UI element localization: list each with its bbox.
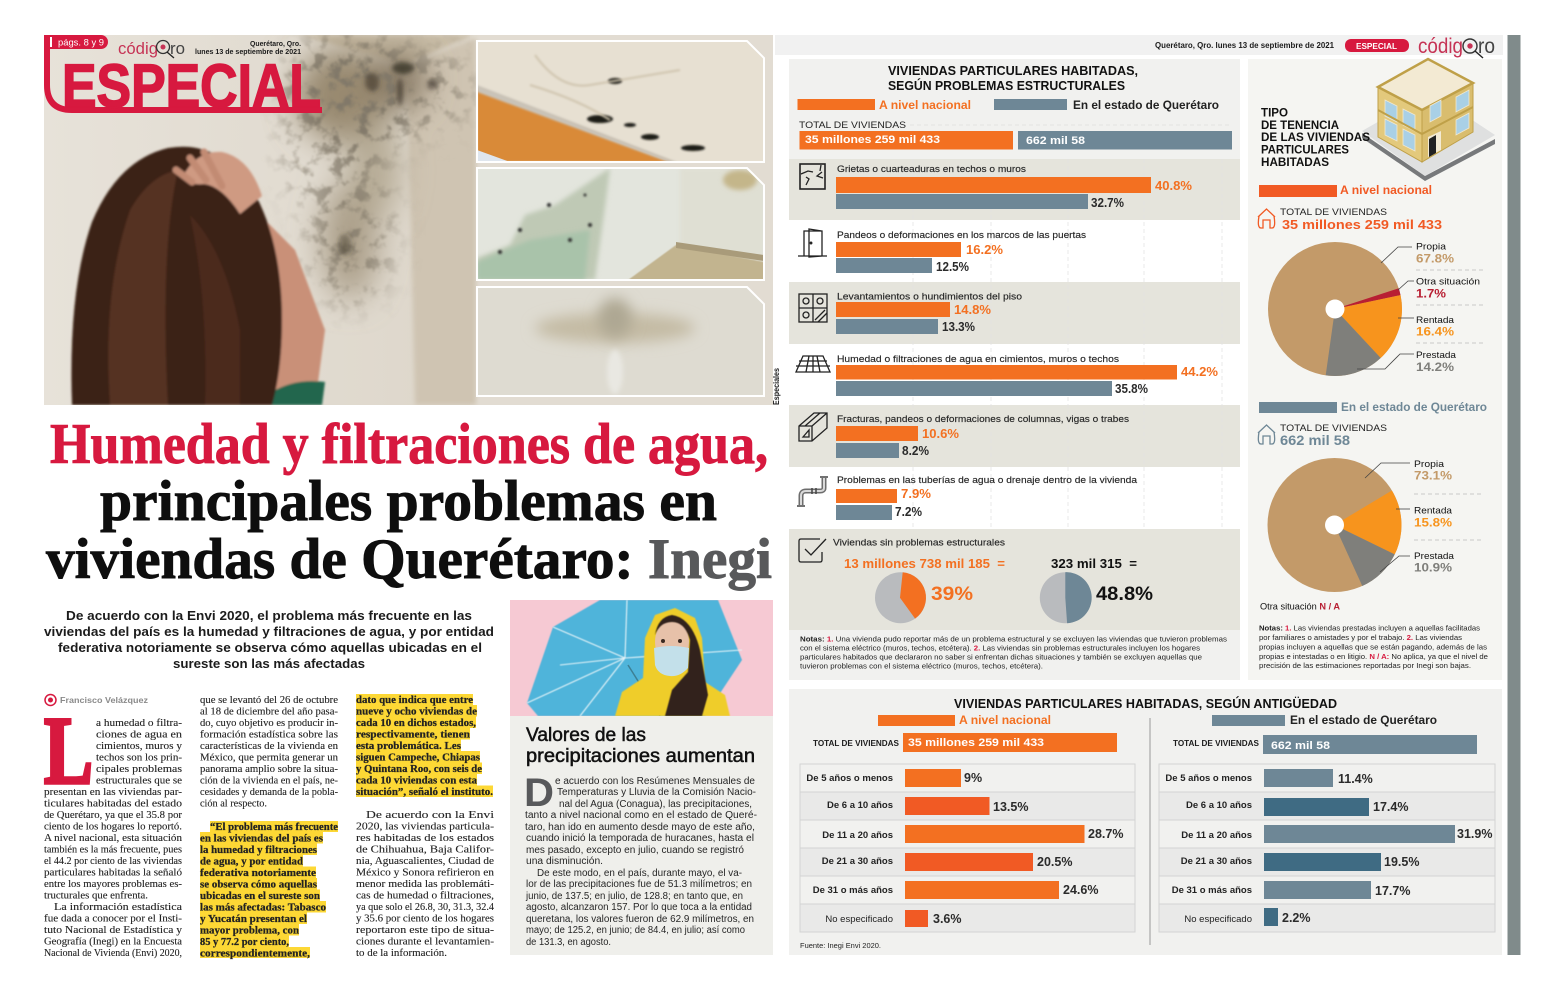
values: 17.4%	[1373, 800, 1408, 814]
article column 1: estructurales que se	[96, 774, 182, 786]
leaders	[1357, 247, 1414, 369]
row: floor: 14.8%	[954, 303, 991, 317]
pie labels: 10.9%	[1414, 560, 1452, 574]
row labels: De 11 a 20 años	[1181, 830, 1252, 841]
article column 3: y 35.6 por ciento de los hogares	[356, 912, 494, 924]
sidebar text: queretana, los valores fueron de 62.9 milímetros, en	[526, 914, 754, 925]
row labels: De 21 a 30 años	[822, 856, 893, 867]
article column 3	[356, 809, 495, 959]
row: cracks: 32.7%	[1091, 196, 1124, 210]
article column 2: características de la vivienda en	[200, 740, 338, 752]
article column 3: nia, Aguascalientes, Ciudad de	[356, 855, 494, 867]
notes	[800, 634, 1227, 670]
article column 1: ticulares habitadas del estado	[44, 798, 183, 810]
values: 20.5%	[1037, 855, 1072, 869]
sidebar text: e acuerdo con los Resúmenes Mensuales de	[555, 776, 755, 787]
row: damp: Humedad o filtraciones de agua en cimientos, muros o techos	[837, 354, 1119, 365]
article column 3: reportaron este tipo de situa-	[356, 924, 494, 936]
header: red tab and section name: págs. 8 y 9	[58, 38, 104, 48]
total bars: 35 millones 259 mil 433	[805, 134, 940, 146]
article column 1: particulares habitadas la señaló	[44, 866, 182, 878]
sidebar heading: Valores de las	[526, 725, 646, 746]
row: no problems: 48.8%	[1096, 584, 1153, 605]
row labels: De 21 a 30 años	[1181, 856, 1252, 867]
logo left: códig	[118, 40, 158, 58]
highlighted quote, column 2: se observa cómo aquellas	[200, 878, 318, 890]
heading: VIVIENDAS PARTICULARES HABITADAS, SEGÚN ANTIGÜEDAD	[954, 696, 1337, 711]
values: 24.6%	[1063, 883, 1098, 897]
pie labels	[1416, 242, 1484, 374]
row: cracks: 40.8%	[1155, 179, 1192, 193]
icon: beam	[799, 413, 827, 441]
highlighted quote, column 3	[356, 694, 493, 798]
row: damp: 44.2%	[1181, 365, 1218, 379]
icon: pipe	[797, 477, 828, 506]
article column 1: entre los mayores problemas es-	[44, 878, 182, 890]
article column 1	[44, 717, 183, 959]
heading	[1261, 108, 1370, 169]
bars	[905, 769, 1084, 927]
section pill: ESPECIAL	[1356, 41, 1397, 51]
row: columns: 8.2%	[902, 444, 929, 458]
highlighted quote, column 3: esta problemática. Les	[356, 740, 462, 752]
article column 1: también es la más frecuente, pues	[44, 844, 182, 856]
row: columns: 10.6%	[922, 427, 959, 441]
row labels	[806, 773, 893, 925]
pie labels: Prestada	[1416, 350, 1457, 361]
total bars: 662 mil 58	[1026, 135, 1085, 147]
row: doors	[798, 229, 1086, 274]
article column 1: de Querétaro, ya que el 35.8 por	[44, 809, 182, 821]
drop cap D: D	[524, 771, 554, 815]
row labels: No especificado	[825, 914, 893, 925]
row labels: De 5 años o menos	[806, 773, 893, 784]
state total: TOTAL DE VIVIENDAS	[1280, 423, 1387, 434]
right page header strip	[775, 35, 1503, 58]
values	[933, 771, 1123, 926]
state total: 662 mil 58	[1280, 432, 1350, 448]
article column 1: cipales problemas	[96, 763, 182, 775]
national legend	[1259, 185, 1432, 197]
logo right: ro	[1478, 35, 1495, 58]
panel: age of dwellings	[789, 689, 1502, 955]
icon: house orange	[1258, 209, 1275, 228]
highlighted quote, column 2: en las viviendas del país es	[200, 832, 324, 844]
right edge bar	[1508, 35, 1520, 955]
pie labels: Prestada	[1414, 551, 1455, 562]
highlighted quote, column 2: “El problema más frecuente	[210, 821, 338, 833]
row: floor	[799, 292, 1022, 334]
highlighted quote, column 3: siguen Campeche, Chiapas	[356, 752, 481, 764]
icon: cracked wall	[800, 164, 825, 189]
notes: Notas: 1. Una vivienda pudo reportar más de un problema estructural y se excluyen las viviendas que tuvieron problemas	[800, 634, 1227, 644]
row labels: De 31 o más años	[1172, 885, 1252, 896]
state chart	[1159, 715, 1495, 932]
bars	[1264, 769, 1455, 926]
headline: principales problemas en	[100, 470, 717, 533]
article column 2: que se levantó del 26 de octubre	[200, 694, 338, 706]
sidebar text: taro, han ido en aumento desde mayo de este año,	[525, 822, 755, 833]
values: 31.9%	[1457, 827, 1492, 841]
heading: TIPO	[1261, 108, 1288, 120]
notes: propias e intestadas o en litigio. N / A: No aplica, ya que el nivel de	[1259, 652, 1488, 661]
pie: state tenure	[1268, 458, 1402, 592]
row: doors: 12.5%	[936, 260, 969, 274]
photo: wall with peeling paint	[477, 168, 764, 280]
pie: national tenure	[1268, 242, 1402, 376]
photo: water stain on ceiling	[532, 290, 698, 393]
article column 1: cimientos, muros y	[96, 740, 183, 752]
article column 1: La información estadística	[54, 901, 182, 913]
highlighted quote, column 3: y Quintana Roo, con seis de	[356, 763, 482, 775]
total bars: TOTAL DE VIVIENDAS	[799, 120, 906, 131]
heading: HABITADAS	[1261, 157, 1329, 169]
panel: tenure	[1248, 59, 1502, 680]
icon: house gray	[1258, 425, 1275, 444]
photo frame 3	[477, 287, 764, 396]
table rows	[800, 764, 1135, 932]
article column 1: fue dada a conocer por el Insti-	[44, 912, 182, 924]
article column 3: ciones durante el levantamien-	[356, 936, 494, 948]
total bars	[799, 120, 1232, 150]
article column 1: A nivel nacional, esta situación	[44, 832, 183, 844]
not applicable note: Otra situación N / A	[1260, 602, 1340, 612]
state total	[1280, 423, 1387, 448]
highlighted quote, column 3: cada 10 en dichos estados,	[356, 717, 476, 729]
highlighted quote, column 2	[200, 821, 338, 960]
highlighted quote, column 2: de agua, y por entidad	[200, 856, 303, 868]
row: no problems: 323 mil 315 =	[1051, 557, 1137, 571]
source: Fuente: Inegi Envi 2020.	[800, 941, 881, 950]
national legend: A nivel nacional	[1340, 185, 1432, 197]
page tab	[44, 35, 108, 49]
values: 17.7%	[1375, 884, 1410, 898]
pie labels: 67.8%	[1416, 252, 1454, 266]
values: 13.5%	[993, 800, 1028, 814]
highlighted quote, column 2: las más afectadas: Tabasco	[200, 902, 327, 914]
heading: DE LAS VIVIENDAS	[1261, 132, 1370, 144]
row labels: De 31 o más años	[813, 885, 893, 896]
dateline left	[195, 39, 301, 56]
legend: A nivel nacional	[879, 100, 971, 112]
dateline left: Querétaro, Qro.	[250, 39, 301, 48]
national chart: A nivel nacional	[959, 715, 1051, 727]
article column 1: ciento de los hogares lo reportó.	[44, 820, 182, 832]
article column 1: tuto Nacional de Estadística y	[44, 924, 183, 936]
row: doors: 16.2%	[966, 243, 1003, 257]
state legend: En el estado de Querétaro	[1341, 402, 1487, 414]
article column 3: México y Sonora refirieron en	[356, 866, 495, 878]
row labels	[1165, 773, 1252, 925]
deck: sureste son las más afectadas	[173, 656, 365, 671]
row: floor: Levantamientos o hundimientos del piso	[837, 292, 1022, 302]
highlighted quote, column 3: situación”, señaló el instituto.	[356, 786, 493, 798]
row: damp	[796, 354, 1218, 396]
highlighted quote, column 2: 85 y 77.2 por ciento,	[200, 936, 289, 948]
section pill	[1345, 39, 1409, 52]
dateline right: Querétaro, Qro. lunes 13 de septiembre de 2021	[1155, 41, 1335, 50]
sidebar text: de 131.3, en agosto.	[526, 937, 611, 948]
icon: roof tiles	[796, 356, 830, 372]
pie labels: 16.4%	[1416, 324, 1454, 338]
logo left	[118, 40, 185, 58]
sidebar panel	[510, 716, 773, 955]
row: columns	[799, 413, 1129, 458]
highlighted quote, column 3: dato que indica que entre	[356, 694, 473, 706]
pie labels: Otra situación	[1416, 276, 1480, 288]
article column 1: tructurales que enfrenta.	[44, 890, 148, 902]
panel heading: VIVIENDAS PARTICULARES HABITADAS,	[888, 64, 1138, 78]
legend: En el estado de Querétaro	[1073, 100, 1219, 112]
pie labels: 14.2%	[1416, 360, 1454, 374]
pie national 39%	[875, 572, 926, 623]
legend	[798, 99, 1219, 112]
photo: ceiling damage	[478, 54, 706, 161]
article column 1: presentan en las viviendas par-	[44, 786, 182, 798]
article column 2: formación estadística sobre las	[200, 728, 338, 740]
article column 2: do, cuyo objetivo es producir in-	[200, 717, 338, 729]
sidebar text: junio, de 137.5; en julio, de 128.8; en tanto que, en	[525, 891, 743, 902]
pie labels: Rentada	[1414, 506, 1453, 516]
pie state 48.8%	[1040, 572, 1092, 623]
national chart	[800, 715, 1135, 932]
sidebar text: tanto a nivel nacional como en el estado de Queré-	[525, 810, 757, 821]
row: no problems: Viviendas sin problemas estructurales	[833, 538, 1005, 548]
sidebar text: mes pasado, excepto en julio, cuando se registró	[526, 845, 744, 856]
state legend	[1259, 402, 1487, 414]
row labels: De 6 a 10 años	[827, 800, 893, 811]
byline: Francisco Velázquez	[60, 695, 148, 705]
state chart: TOTAL DE VIVIENDAS	[1173, 739, 1260, 748]
illustration: building	[1362, 59, 1495, 181]
article column 3: De acuerdo con la Envi	[366, 809, 494, 821]
leaders	[1365, 463, 1410, 572]
row: cracks	[800, 164, 1192, 210]
heading: DE TENENCIA	[1261, 120, 1339, 132]
values: 19.5%	[1384, 855, 1419, 869]
pie labels: 15.8%	[1414, 516, 1452, 530]
row: doors: Pandeos o deformaciones en los marcos de las puertas	[837, 230, 1086, 241]
article column 3: de Chihuahua, Baja Califor-	[356, 844, 494, 856]
row labels: De 6 a 10 años	[1186, 800, 1252, 811]
highlighted quote, column 2: la humedad y filtraciones	[200, 844, 318, 856]
article column 1: ciones de agua en	[96, 728, 183, 740]
row: pipes	[797, 475, 1138, 520]
sidebar text: mayo; de 125.2, en junio; de 84.4, en julio; así como	[526, 925, 745, 936]
row: cracks: Grietas o cuarteaduras en techos o muros	[837, 164, 1026, 175]
state chart: En el estado de Querétaro	[1290, 715, 1437, 727]
sidebar heading: precipitaciones aumentan	[526, 746, 755, 767]
article column 3: res habitadas de los estados	[356, 832, 494, 844]
headline	[46, 413, 772, 591]
national total: TOTAL DE VIVIENDAS	[1280, 207, 1387, 218]
highlighted quote, column 2: y Yucatán presentan el	[200, 913, 307, 925]
row: pipes: Problemas en las tuberías de agua o drenaje dentro de la vivienda	[837, 475, 1138, 486]
highlighted quote, column 3: cada 10 viviendas con esta	[356, 774, 477, 786]
article column 2	[200, 694, 338, 810]
heading: PARTICULARES	[1261, 144, 1349, 156]
notes: particulares habitados que declararon no saber si enfrentan dichas situaciones y también se excluyen aquellas que	[800, 652, 1202, 662]
row: damp: 35.8%	[1115, 382, 1148, 396]
article column 2: ción al respecto.	[200, 798, 267, 810]
article column 3: menor medida las problemáti-	[356, 878, 494, 890]
highlighted quote, column 2: correspondientemente,	[200, 948, 310, 960]
article column 3: to de la información.	[356, 947, 447, 959]
photo frame 2	[477, 168, 764, 280]
highlighted quote, column 2: federativa notoriamente	[200, 867, 316, 879]
main photo: damp wall and woman	[44, 35, 773, 405]
highlighted quote, column 2: ubicadas en el sureste son	[200, 890, 320, 902]
icon: checkbox	[799, 539, 826, 562]
row: no problems: 39%	[931, 584, 973, 605]
dateline left: lunes 13 de septiembre de 2021	[195, 47, 301, 56]
deck	[44, 608, 494, 671]
article column 1: Geografía (Inegi) en la Encuesta	[44, 936, 182, 948]
row: pipes: 7.9%	[901, 487, 931, 501]
photo frame 1	[477, 41, 764, 162]
sidebar heading	[526, 725, 755, 767]
row: no problems	[799, 538, 1153, 623]
values	[1282, 772, 1492, 925]
sidebar text: lor de las precipitaciones fue de 51.3 milímetros; en	[526, 879, 752, 890]
article column 2: México, que permita generar un	[200, 752, 338, 764]
notes: propias incluyen a aquellas que se están pagando, además de las	[1259, 642, 1487, 652]
pie labels: Propia	[1414, 459, 1445, 470]
deck: De acuerdo con la Envi 2020, el problema más frecuente en las	[66, 608, 472, 623]
drop cap L: L	[44, 697, 93, 804]
national chart: 35 millones 259 mil 433	[908, 737, 1044, 749]
row: floor: 13.3%	[942, 320, 975, 334]
article column 2: panorama amplio sobre la situa-	[200, 763, 338, 775]
highlighted quote, column 2: mayor problema, con	[200, 924, 299, 936]
article column 2: cesidades y demanda de la pobla-	[200, 786, 338, 798]
values: 3.6%	[933, 912, 962, 926]
sidebar text	[525, 776, 757, 948]
deck: viviendas del país es la humedad y filtraciones de agua, y por entidad	[44, 624, 494, 639]
row: pipes: 7.2%	[895, 505, 922, 519]
notes: con el sistema eléctrico (muros, techos, etcétera). 2. Las viviendas sin problemas estructurales incluyen los hogares	[800, 644, 1200, 652]
logo left: ro	[170, 40, 185, 58]
notes: Notas: 1. Las viviendas prestadas incluyen a aquellas facilitadas	[1259, 624, 1480, 632]
notes: precisión de las estimaciones reportadas por Inegi son bajas.	[1259, 661, 1471, 670]
article column 1: Nacional de Vivienda (Envi) 2020,	[44, 947, 182, 959]
table rows	[1159, 764, 1495, 932]
sidebar text: nal del Agua (Conagua), las precipitaciones,	[559, 799, 752, 810]
notes: tuvieron problemas con el sistema eléctrico (muros, techos, etcétera).	[800, 662, 1043, 670]
values: 11.4%	[1338, 772, 1373, 786]
row labels: De 11 a 20 años	[822, 830, 893, 841]
row labels: De 5 años o menos	[1165, 773, 1252, 784]
sidebar text: cuando inició la temporada de huracanes, hasta el	[526, 833, 754, 844]
article column 3: cas de humedad o filtraciones,	[356, 890, 494, 902]
national total	[1280, 207, 1442, 232]
highlighted quote, column 3: nueve y ocho viviendas de	[356, 706, 477, 718]
panel heading: SEGÚN PROBLEMAS ESTRUCTURALES	[888, 78, 1125, 93]
pie labels: Rentada	[1416, 315, 1455, 326]
values: 2.2%	[1282, 911, 1310, 925]
icon: floor tiles	[799, 294, 827, 322]
article column 3: ya que solo el 26.8, 30, 31.3, 32.4	[356, 901, 494, 913]
sidebar text: agosto, alcanzaron 157. Por lo que toca a la entidad	[526, 902, 752, 913]
header: red tab and section name	[44, 35, 322, 120]
pie labels: 1.7%	[1416, 286, 1446, 300]
highlighted quote, column 3: respectivamente, tienen	[356, 728, 470, 740]
article column 1: a humedad o filtra-	[96, 717, 182, 729]
row: no problems: 13 millones 738 mil 185 =	[844, 557, 1005, 571]
article column 2: ción de la vivienda en el país, ne-	[200, 774, 338, 786]
logo right	[1418, 35, 1495, 58]
notes	[1259, 624, 1488, 670]
row: columns: Fracturas, pandeos o deformaciones de columnas, vigas o trabes	[837, 414, 1129, 425]
vertical section tag: Especiales	[772, 368, 781, 405]
article column 1: el 44.2 por ciento de las viviendas	[44, 855, 182, 867]
icon: door	[798, 229, 827, 257]
article column 2: al 18 de diciembre del año pasa-	[200, 706, 338, 718]
photo: woman with umbrella and face mask	[510, 600, 773, 716]
pie labels: Propia	[1416, 242, 1447, 252]
logo right: códig	[1418, 35, 1463, 58]
section title: ESPECIAL	[62, 52, 321, 120]
deck: federativa notoriamente se observa cómo aquellas ubicadas en el	[58, 640, 482, 655]
panel: structural problems	[789, 59, 1240, 680]
article column 3: 2020, las viviendas particula-	[356, 820, 494, 832]
notes: por familiares o amistades y por el trabajo. 2. Las viviendas	[1259, 633, 1462, 642]
sidebar text: De este modo, en el país, durante mayo, el va-	[537, 868, 742, 879]
headline: Humedad y filtraciones de agua,	[50, 413, 768, 476]
row labels: No especificado	[1184, 914, 1252, 925]
national chart: TOTAL DE VIVIENDAS	[813, 739, 900, 748]
pie labels: 73.1%	[1414, 468, 1452, 482]
headline: viviendas de Querétaro: Inegi	[46, 528, 772, 591]
sidebar text: una disminución.	[526, 856, 603, 867]
panel heading	[888, 64, 1138, 93]
national total: 35 millones 259 mil 433	[1282, 217, 1442, 232]
sidebar text: Temperaturas y Lluvia de la Comisión Nacio-	[557, 787, 756, 798]
values: 9%	[964, 771, 982, 785]
article column 1: techos son los prin-	[96, 752, 182, 764]
pie labels	[1414, 459, 1482, 574]
state chart: 662 mil 58	[1271, 740, 1330, 752]
values: 28.7%	[1088, 827, 1123, 841]
